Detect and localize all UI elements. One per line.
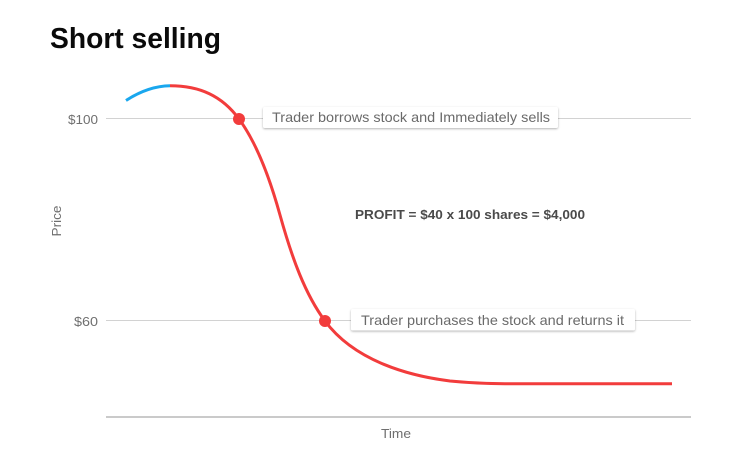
- x axis line: [106, 416, 691, 418]
- callout: trader purchases: [351, 309, 635, 330]
- y axis title: Price: Price: [49, 205, 64, 237]
- profit calculation text: PROFIT = $40 x 100 shares = $4,000: [355, 207, 585, 222]
- callout: trader borrows: Trader borrows stock and Immediately sells: [272, 109, 550, 125]
- x axis title: Time: Time: [381, 426, 411, 441]
- price curve: red segment: [170, 86, 672, 384]
- price curve: blue segment: [126, 86, 170, 100]
- marker: purchase and return point: [319, 315, 331, 327]
- y axis label: $100: $100: [68, 112, 98, 127]
- title: Short selling: [50, 23, 221, 55]
- y axis label: $60: $60: [74, 314, 98, 329]
- marker: borrow and sell point: [233, 113, 245, 125]
- callout: trader borrows: [263, 107, 558, 128]
- callout: trader purchases: Trader purchases the stock and returns it: [361, 312, 624, 328]
